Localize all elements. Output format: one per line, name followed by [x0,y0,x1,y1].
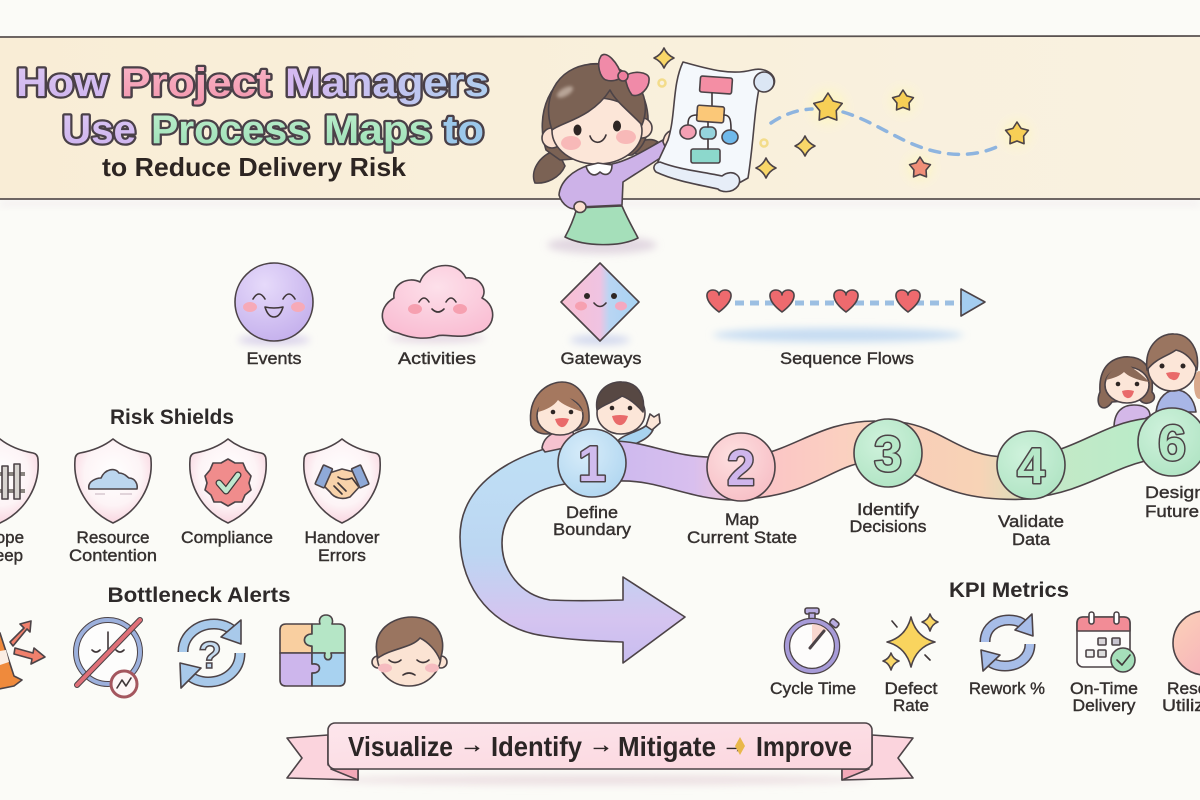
subtitle: to Reduce Delivery Risk [102,152,407,182]
KPI: Rework % [969,614,1045,698]
ribbon motto [348,731,852,762]
shield: Resource Contention: Resource [76,528,150,547]
title: Process [151,108,310,152]
element: Sequence Flows: Sequence Flows [780,349,914,368]
step 4 [997,431,1065,549]
step 3 [850,419,926,536]
alert icon: crossed clock [76,620,140,697]
ribbon motto: → [460,732,484,757]
step 3: Decisions [850,517,926,536]
alert icon: question cycle: ? [198,635,222,677]
heading: KPI Metrics: KPI Metrics [949,579,1069,602]
step 6: 6 [1158,415,1186,471]
shield: Resource Contention: Contention [69,546,157,565]
KPI: On-Time Delivery [1070,612,1138,715]
element: Events [235,263,313,368]
step 4: Data [1012,530,1051,549]
ribbon motto: Visualize [348,731,453,762]
element: Events: Events [246,349,302,368]
shield: Resource Contention [69,439,157,565]
KPI: On-Time Delivery: On-Time [1070,679,1138,698]
title [16,61,489,152]
alert icon: puzzle [280,615,345,686]
step 2: Map [725,510,759,529]
header banner [0,36,1200,206]
flowchart on scroll [680,76,738,163]
shield: Handover Errors: Handover [304,528,380,547]
alert icon: tired face [372,617,447,686]
element: Sequence Flows [707,289,985,368]
alert icon: question cycle [180,620,241,688]
alert icon: traffic cone and arrows [0,621,45,690]
shield: Handover Errors: Errors [318,546,366,565]
step 4: Validate [998,512,1064,531]
heading: Bottleneck Alerts: Bottleneck Alerts [108,584,290,607]
step 1 [553,429,632,539]
title: Managers [285,61,489,105]
step 4: 4 [1017,438,1045,494]
ribbon motto: Improve [756,731,852,762]
heading: Risk Shields: Risk Shields [110,406,234,429]
KPI: Defect Rate: Rate [893,696,929,715]
step 6: Design [1145,483,1200,502]
step 1: Boundary [553,520,632,539]
title: How [16,61,109,105]
step 1: 1 [578,436,606,492]
ribbon motto: Identify [491,731,582,762]
element: Activities: Activities [398,349,476,368]
step 2: 2 [727,440,755,496]
step 3: Identify [857,500,920,519]
shield: Scope Creep [0,439,38,565]
title: to [443,108,484,152]
step 2: Current State [687,528,797,547]
process ribbon [615,418,1150,500]
process map scroll [654,62,775,192]
element: Gateways [560,263,642,368]
bottom ribbon banner [287,723,913,785]
element: Gateways: Gateways [560,349,642,368]
big curved process arrow [460,444,685,663]
ribbon motto: → [589,732,613,757]
title: Project [121,61,271,105]
step 1: Define [566,503,618,522]
title: Maps [324,108,432,152]
character: girl presenting map [534,54,677,254]
KPI: On-Time Delivery: Delivery [1072,696,1136,715]
step 6 [1138,408,1200,521]
step 6: Future [1145,502,1199,521]
ribbon motto: → [722,732,746,757]
title: Use [62,108,136,152]
KPI: Defect Rate [883,614,938,715]
shield: Compliance: Compliance [181,528,273,547]
kids on step 6 [1098,334,1200,430]
KPI: Resource Utilization [1162,611,1200,715]
kids on step 1 [531,382,660,452]
KPI: Rework %: Rework % [969,679,1045,698]
shield: Compliance [181,439,273,547]
KPI: Cycle Time [770,608,856,698]
KPI: Defect Rate: Defect [884,679,938,698]
shield: Handover Errors [304,439,380,565]
step 3: 3 [874,426,902,482]
ribbon motto: Mitigate [618,731,716,762]
stars and dashed path [654,48,1031,181]
KPI: Cycle Time: Cycle Time [770,679,856,698]
element: Activities [382,266,493,368]
step 2 [687,433,797,547]
